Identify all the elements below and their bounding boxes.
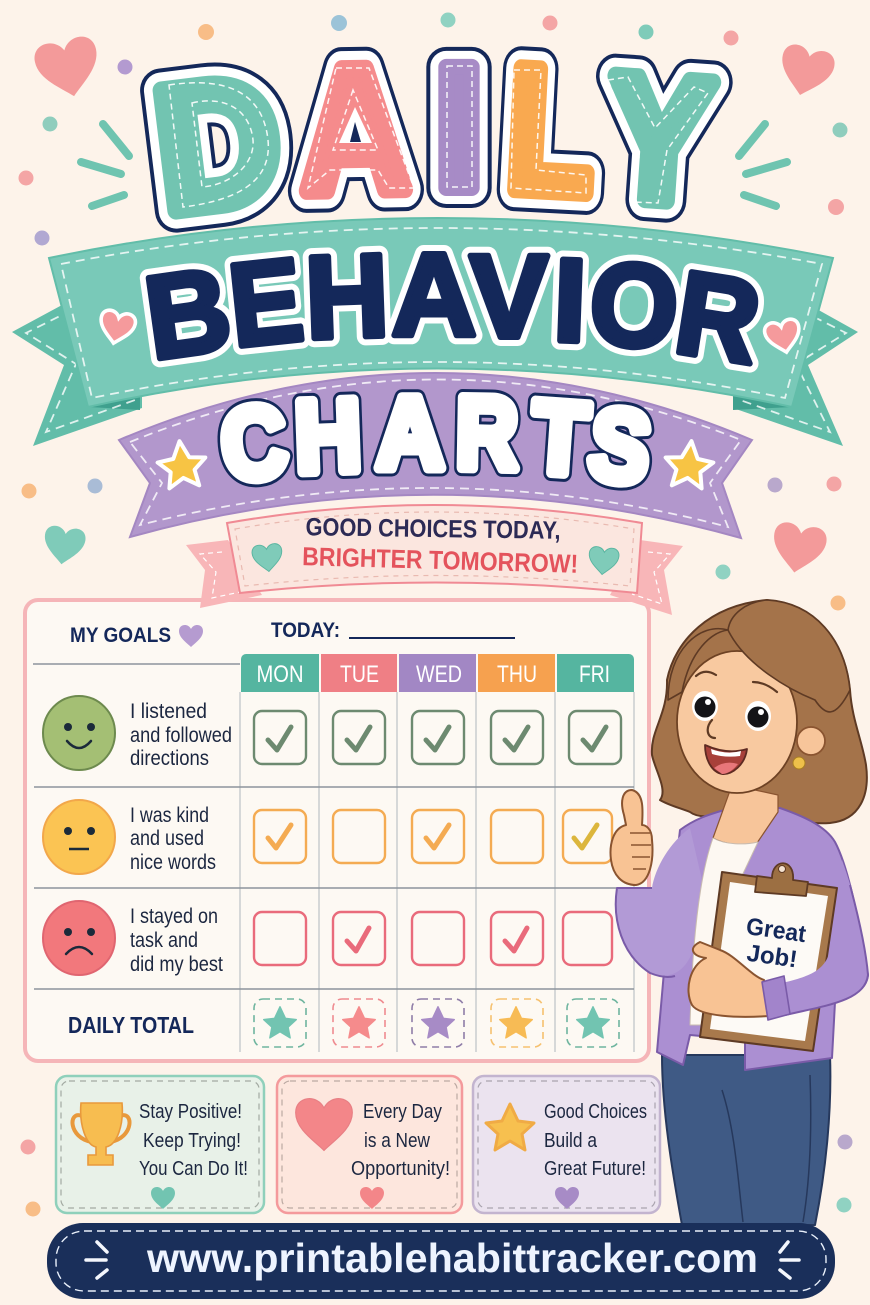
website url: www.printablehabittracker.com bbox=[146, 1235, 758, 1281]
row: on task bbox=[43, 901, 612, 976]
letter L: L bbox=[503, 30, 599, 231]
right sleeve bbox=[775, 860, 868, 1015]
card: good choices bbox=[473, 1076, 660, 1213]
goal text bbox=[130, 804, 216, 874]
clipboard text bbox=[744, 913, 808, 973]
left tail bbox=[12, 298, 142, 446]
white outline layer: I bbox=[551, 234, 589, 368]
navy letter layer: R bbox=[667, 245, 769, 389]
icon: small heart bbox=[151, 1187, 175, 1209]
letter L: L bbox=[503, 30, 599, 231]
sparkle rays right bbox=[739, 124, 787, 206]
banner: pink tagline bbox=[186, 505, 683, 615]
ear bbox=[797, 727, 825, 755]
fringe bbox=[728, 600, 850, 712]
sleeve cuff bbox=[762, 976, 790, 1020]
thumbs-up hand bbox=[611, 790, 652, 885]
card text: is a New bbox=[364, 1130, 430, 1152]
card text: You Can Do It! bbox=[139, 1158, 248, 1180]
navy outline layer bbox=[216, 375, 657, 507]
icon: star left bbox=[156, 439, 208, 489]
card: every day bbox=[277, 1076, 462, 1213]
white letter layer: T bbox=[528, 379, 592, 497]
icon: heart bbox=[296, 1099, 352, 1150]
goal text: and used bbox=[130, 827, 204, 850]
goal text: I stayed on bbox=[130, 905, 218, 928]
letter Y: Y bbox=[602, 38, 718, 242]
goal text: and followed bbox=[130, 724, 232, 747]
letter I: I bbox=[435, 30, 483, 226]
hair back bbox=[652, 600, 867, 823]
white letter layer: A bbox=[376, 375, 444, 490]
goal text: I was kind bbox=[130, 804, 209, 827]
card text bbox=[351, 1101, 450, 1180]
letter D: D bbox=[145, 39, 290, 249]
clipboard paper bbox=[710, 882, 828, 1041]
ribbon body bbox=[49, 218, 833, 407]
card text: Every Day bbox=[363, 1101, 442, 1123]
white outline layer: R bbox=[667, 245, 769, 389]
clipboard text: Job! bbox=[745, 940, 799, 973]
heading: today: TODAY: bbox=[271, 619, 340, 642]
letter D: D bbox=[145, 39, 290, 249]
mouth bbox=[705, 745, 747, 774]
left tail bbox=[186, 540, 262, 608]
right tail bbox=[733, 298, 858, 446]
title: CHARTS bbox=[216, 375, 657, 507]
navy letter layer bbox=[137, 229, 769, 389]
holding hand bbox=[688, 942, 768, 1017]
navy letter layer: E bbox=[223, 233, 309, 372]
footer: website bar bbox=[47, 1223, 835, 1299]
icon: star right bbox=[663, 439, 715, 489]
sparkle rays left bbox=[81, 124, 129, 206]
navy letter layer: H bbox=[303, 229, 391, 364]
row: listened bbox=[43, 696, 621, 770]
white outline layer: H bbox=[303, 229, 391, 364]
icon: small heart bbox=[555, 1187, 579, 1209]
tagline text line 1: GOOD CHOICES TODAY, bbox=[305, 513, 561, 545]
icon: happy face bbox=[43, 696, 115, 770]
day headers: MON bbox=[256, 661, 304, 688]
day headers: WED bbox=[416, 661, 462, 688]
goal text: directions bbox=[130, 747, 209, 770]
letter A: A bbox=[300, 31, 410, 229]
neck bbox=[713, 785, 778, 845]
row: daily total: DAILY TOTAL bbox=[68, 1012, 194, 1038]
icon: small heart bbox=[360, 1187, 384, 1209]
icon: purple heart bbox=[179, 625, 203, 647]
panel: behavior chart bbox=[25, 600, 649, 1061]
card text: Good Choices bbox=[544, 1101, 647, 1123]
card: stay positive bbox=[56, 1076, 264, 1213]
icon: neutral face bbox=[43, 800, 115, 874]
navy letter layer: A bbox=[391, 229, 477, 361]
card text: Keep Trying! bbox=[143, 1130, 241, 1152]
letter Y: Y bbox=[602, 38, 718, 242]
banner: purple ribbon bbox=[119, 373, 752, 538]
navy outline layer: C bbox=[216, 384, 292, 503]
white outline layer bbox=[137, 229, 769, 389]
row: kind bbox=[43, 800, 612, 874]
white outline layer: A bbox=[391, 229, 477, 361]
icon: heart on teal left bbox=[97, 309, 137, 347]
tagline text line 2: BRIGHTER TOMORROW! bbox=[302, 541, 579, 579]
eyebrows and nose bbox=[696, 672, 777, 738]
letter I: I bbox=[435, 30, 483, 226]
letter L: L bbox=[503, 30, 599, 231]
day headers: THU bbox=[497, 661, 537, 688]
character: teacher bbox=[611, 600, 868, 1225]
white outline layer: E bbox=[223, 233, 309, 372]
row: daily total bbox=[68, 999, 619, 1047]
cardigan bbox=[657, 808, 868, 1070]
white letter layer: S bbox=[583, 386, 657, 507]
goal text: nice words bbox=[130, 851, 216, 874]
goal text bbox=[130, 700, 232, 770]
letter A: A bbox=[300, 31, 410, 229]
goal text: did my best bbox=[130, 953, 223, 976]
checkboxes bbox=[254, 912, 612, 965]
heading: my goals: MY GOALS bbox=[70, 624, 171, 647]
banner: teal ribbon bbox=[12, 218, 858, 446]
letter Y: Y bbox=[602, 38, 718, 242]
navy outline layer: S bbox=[583, 386, 657, 507]
title: BEHAVIOR bbox=[137, 229, 769, 389]
left sleeve bbox=[616, 828, 702, 976]
goal text: I listened bbox=[130, 700, 207, 723]
day headers: TUE bbox=[340, 661, 379, 688]
clipboard text: Great bbox=[744, 913, 808, 948]
icon: trophy bbox=[73, 1103, 129, 1165]
letter A: A bbox=[300, 31, 410, 229]
navy letter layer: V bbox=[470, 231, 548, 363]
icon: heart on teal right bbox=[763, 318, 803, 356]
day headers: FRI bbox=[579, 661, 610, 688]
sparkle left bbox=[86, 1242, 107, 1278]
earring bbox=[793, 757, 805, 769]
icon: heart pink right bbox=[768, 520, 829, 577]
letter I: I bbox=[435, 30, 483, 226]
letter D: D bbox=[145, 39, 290, 249]
white outline layer: V bbox=[470, 231, 548, 363]
clipboard bbox=[700, 863, 837, 1051]
clipboard clip bbox=[755, 863, 808, 896]
navy letter layer: I bbox=[551, 234, 589, 368]
white outline layer: B bbox=[137, 242, 238, 384]
icon: star bbox=[486, 1104, 534, 1150]
white letter layer: H bbox=[293, 377, 363, 494]
checkboxes bbox=[254, 810, 612, 863]
face bbox=[677, 651, 797, 793]
checkboxes bbox=[254, 711, 621, 764]
icon: sad face bbox=[43, 901, 115, 975]
white letter layer: C bbox=[216, 384, 292, 503]
t-shirt bbox=[690, 838, 760, 1025]
tagline body bbox=[227, 505, 642, 593]
card text: Stay Positive! bbox=[139, 1101, 242, 1123]
card text bbox=[544, 1101, 647, 1180]
card text: Opportunity! bbox=[351, 1158, 450, 1180]
icon: heart top left bbox=[32, 34, 105, 103]
goal text bbox=[130, 905, 223, 976]
card text bbox=[139, 1101, 248, 1180]
jeans bbox=[662, 1055, 830, 1225]
navy letter layer: O bbox=[585, 236, 683, 374]
day headers bbox=[241, 654, 634, 692]
navy letter layer: B bbox=[137, 242, 238, 384]
card text: Build a bbox=[544, 1130, 598, 1152]
icon: heart left bbox=[251, 543, 284, 573]
goal text: task and bbox=[130, 929, 198, 952]
sparkle right bbox=[780, 1242, 799, 1278]
icon: heart right bbox=[587, 546, 620, 576]
white letter layer bbox=[216, 375, 657, 507]
navy outline layer: A bbox=[376, 375, 444, 490]
navy outline layer: R bbox=[455, 375, 519, 490]
navy outline layer: T bbox=[528, 379, 592, 497]
right tail bbox=[610, 540, 683, 615]
white outline layer: O bbox=[585, 236, 683, 374]
icon: heart teal left bbox=[41, 524, 87, 567]
eyes bbox=[692, 691, 771, 731]
white letter layer: R bbox=[455, 375, 519, 490]
navy outline layer: H bbox=[293, 377, 363, 494]
title: DAILY bbox=[145, 30, 718, 249]
icon: heart top right bbox=[774, 42, 837, 101]
card text: Great Future! bbox=[544, 1158, 646, 1180]
